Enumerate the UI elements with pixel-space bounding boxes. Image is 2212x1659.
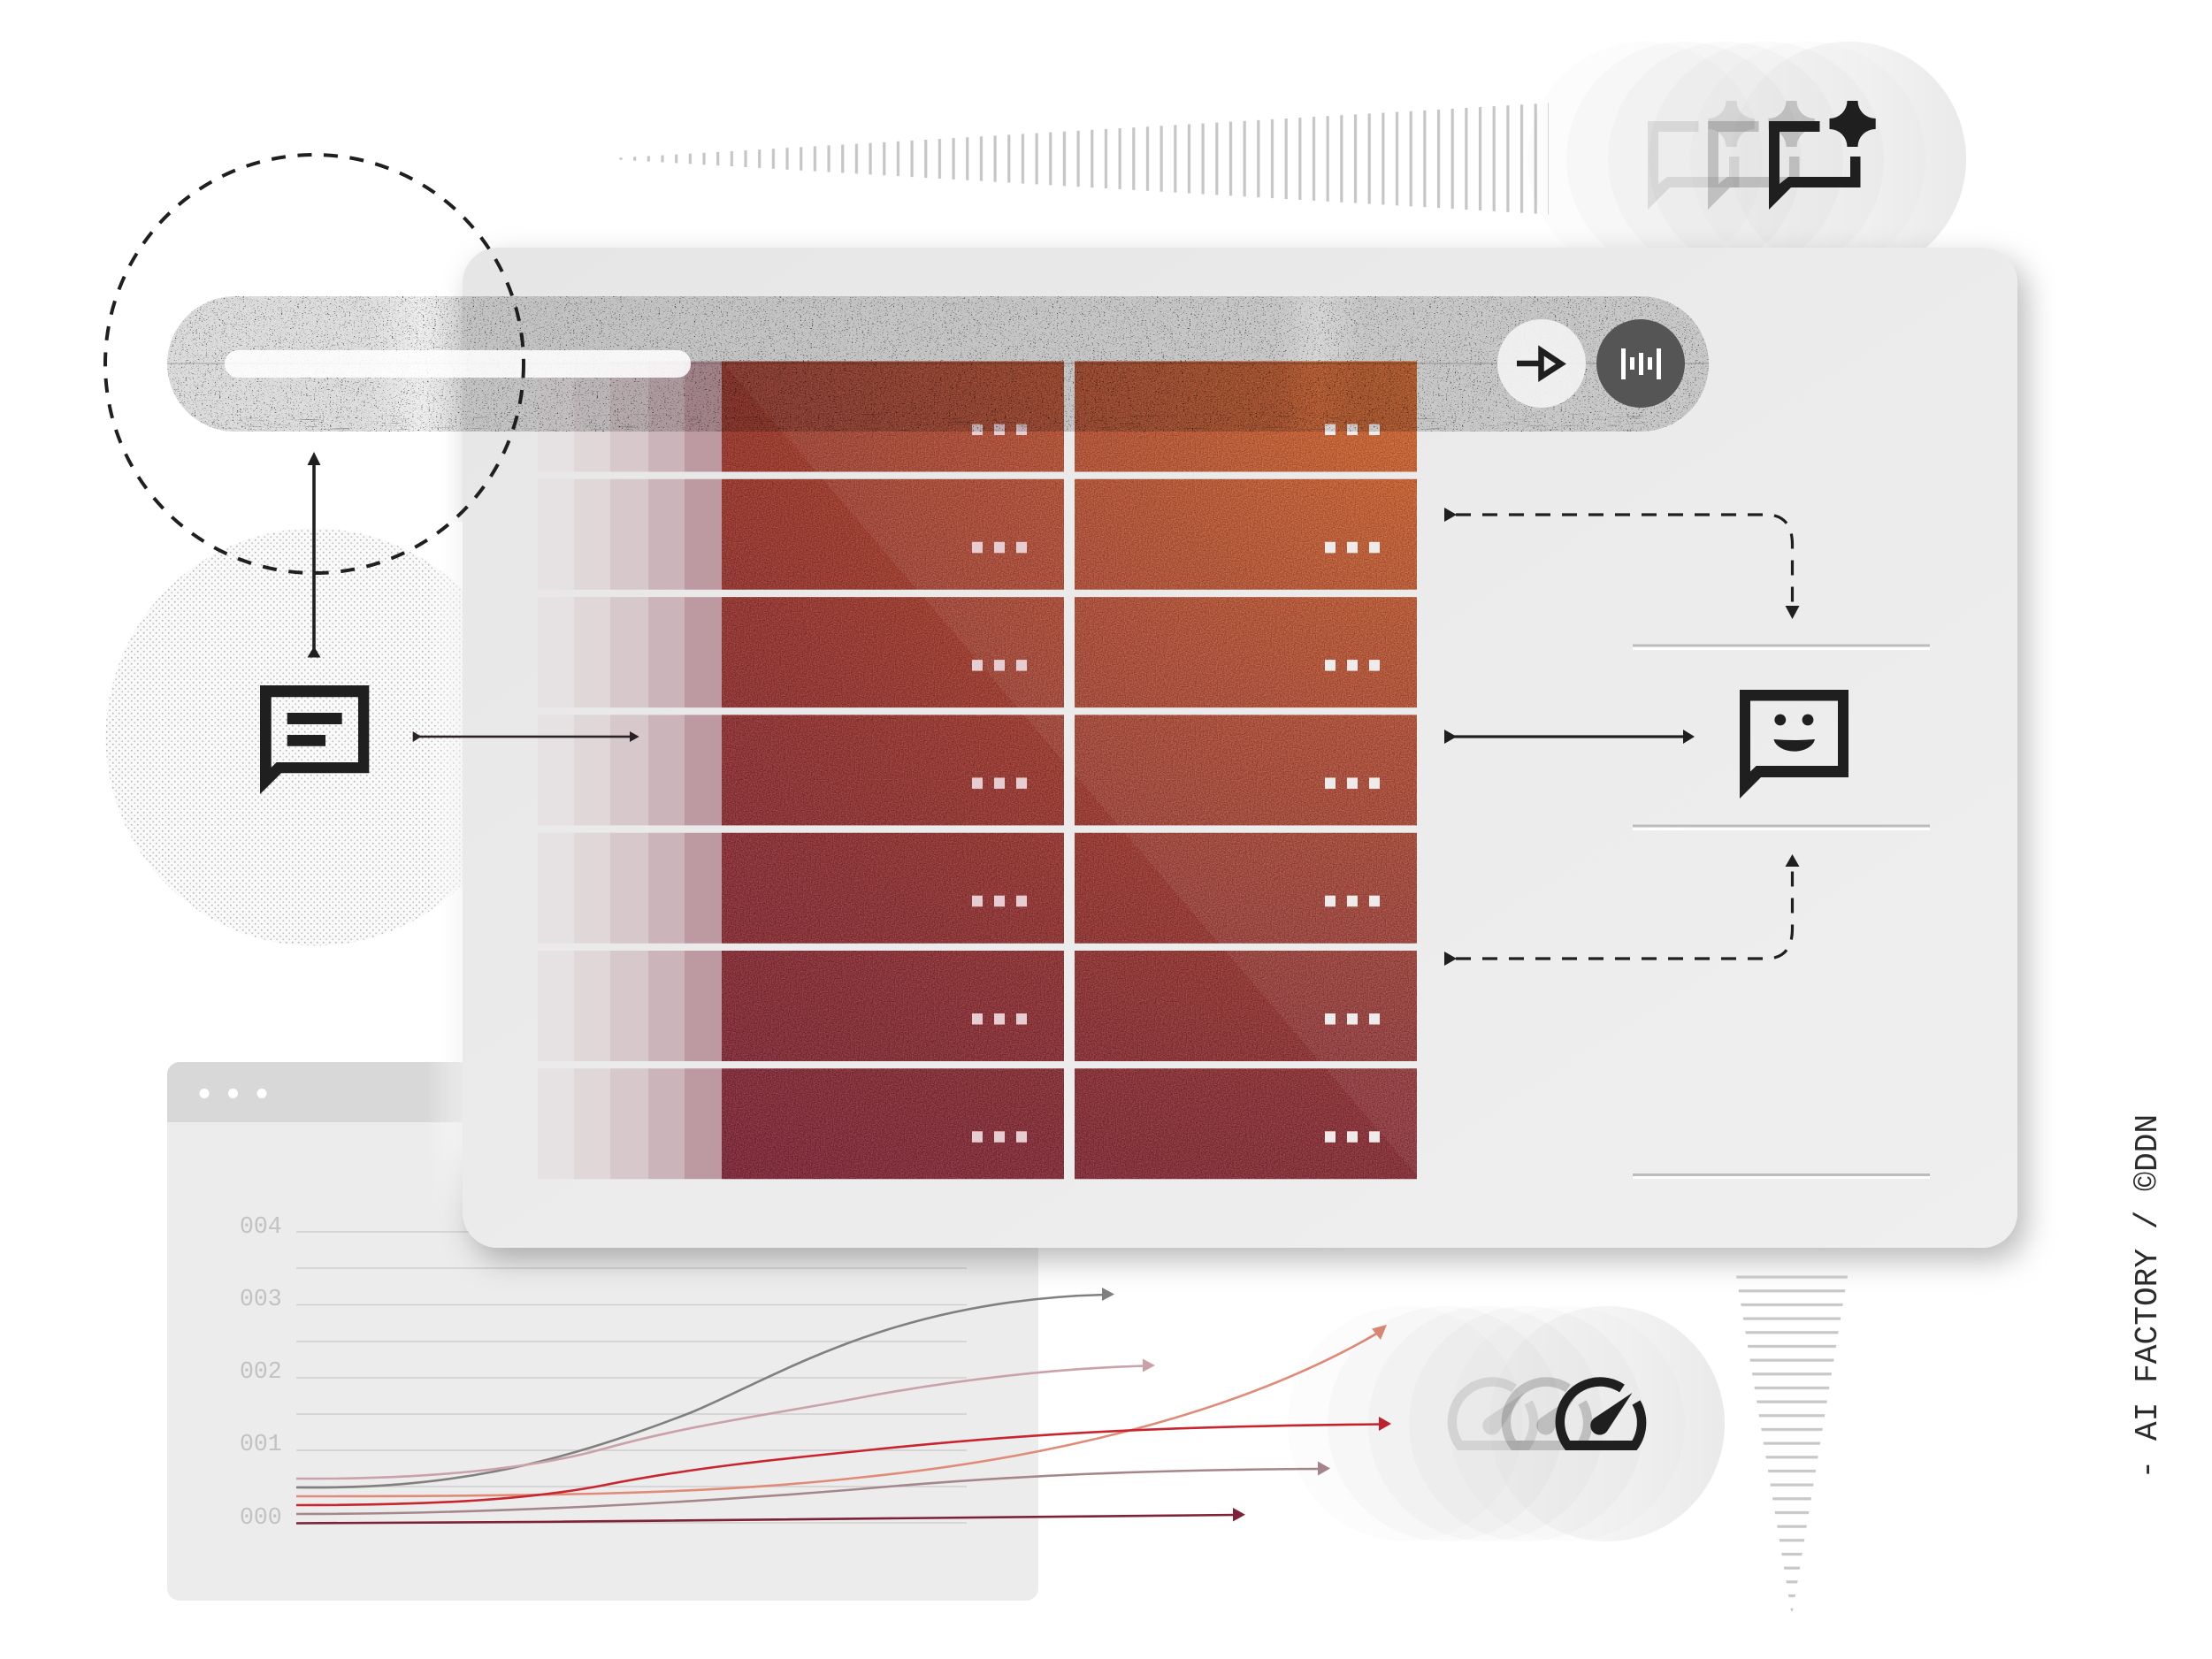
chart grid	[296, 1232, 967, 1523]
icon: solid sparkle chat	[1769, 101, 1876, 210]
table: shaded rows	[538, 354, 1433, 1194]
caption: - AI FACTORY / ©DDN	[2130, 1114, 2166, 1479]
panel: main interface	[463, 248, 2017, 1248]
axis labels: 001	[240, 1431, 282, 1457]
axis labels: 003	[240, 1286, 282, 1312]
diagonal light overlay	[722, 361, 1433, 1194]
solid output arrow	[1444, 730, 1695, 744]
window body	[167, 1062, 1038, 1601]
send button	[1497, 319, 1586, 408]
icon: smiley chat bubble	[1740, 690, 1848, 799]
axis labels: 000	[240, 1504, 282, 1531]
curve: pink	[296, 1358, 1155, 1479]
arrow into table	[413, 731, 639, 742]
curve: maroon	[296, 1508, 1245, 1523]
dashed focus circle	[105, 155, 524, 573]
icon: faint sparkle chat	[1648, 101, 1755, 210]
icon: faint gauge	[1452, 1382, 1534, 1459]
dashed arrow from top	[1444, 508, 1799, 619]
faded strips	[538, 898, 574, 1179]
icon: sparkle chat trail	[1648, 101, 1876, 210]
curve: red	[296, 1417, 1391, 1505]
top ghost circles	[1527, 42, 1966, 277]
axis labels: 004	[240, 1213, 282, 1240]
axis labels: 002	[240, 1358, 282, 1385]
curve: mauve	[296, 1461, 1330, 1514]
voice button	[1596, 319, 1685, 408]
soft light beside panel	[434, 522, 463, 1197]
row menu dots: column one	[972, 424, 1027, 1143]
halftone circle	[106, 529, 524, 946]
dashed arrow from bottom	[1444, 854, 1799, 966]
icon: mid gauge	[1506, 1382, 1588, 1459]
search input pill	[225, 350, 691, 378]
panel: line chart window	[167, 1062, 1038, 1601]
axis labels	[240, 1213, 282, 1531]
top tick wedge	[619, 103, 1549, 214]
bottom tick funnel	[1736, 1275, 1848, 1612]
vertical arrow	[308, 452, 320, 658]
icon: message bubble	[260, 685, 369, 794]
search bar	[167, 296, 1709, 432]
right column rules	[1633, 644, 1930, 1179]
curve: grey	[296, 1288, 1114, 1487]
red gradient cells	[722, 354, 1429, 1185]
chart curves with arrows	[296, 1288, 1391, 1523]
window title bar	[167, 1062, 1038, 1122]
grain	[722, 354, 1429, 1185]
icon: solid gauge	[1560, 1382, 1642, 1459]
curve: salmon	[296, 1325, 1387, 1496]
icon: mid sparkle chat	[1708, 101, 1815, 210]
icon: gauge trail	[1452, 1382, 1642, 1459]
bottom ghost circles	[1288, 1306, 1725, 1541]
row menu dots: column two	[1325, 424, 1380, 1143]
window dots	[200, 1089, 267, 1098]
